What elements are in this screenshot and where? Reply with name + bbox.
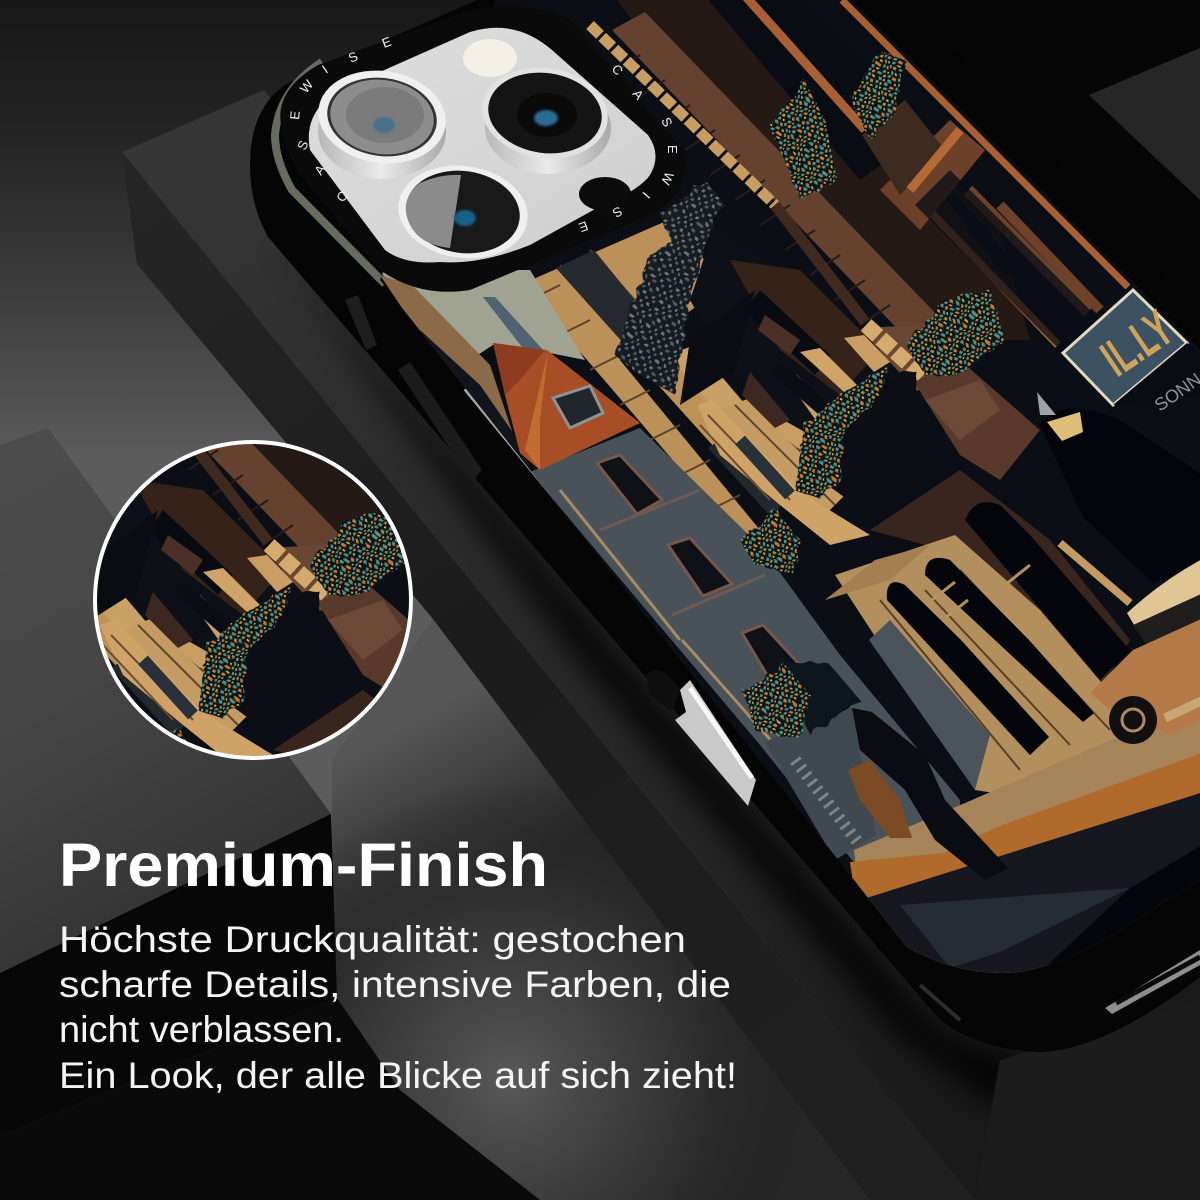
charging port — [1105, 950, 1200, 1014]
left block front — [0, 814, 337, 1136]
bottom left shadow — [0, 998, 540, 1200]
upper backdrop — [0, 0, 840, 1200]
top right block face — [1089, 48, 1200, 200]
side button: volume — [398, 362, 482, 482]
left block top — [0, 428, 331, 973]
inset magnifier — [93, 440, 413, 760]
phone contact shadow — [270, 240, 1040, 1110]
bottom right floor tone — [975, 1000, 1200, 1200]
side button: camera control — [345, 295, 377, 350]
body text: Ein Look, der alle Blicke auf sich zieht! — [59, 1055, 737, 1096]
body text: scharfe Details, intensive Farben, die — [59, 964, 731, 1005]
glossy edge highlight — [465, 389, 932, 950]
main block side — [122, 152, 975, 1200]
body text: Höchste Druckqualität: gestochen — [59, 919, 686, 960]
lens right — [476, 60, 614, 174]
body text — [59, 919, 737, 1096]
case artwork — [360, 0, 1200, 1000]
flash — [463, 39, 517, 77]
side button: silver — [675, 680, 756, 806]
camera glass — [309, 28, 656, 262]
sensor dot — [579, 177, 631, 211]
body text: nicht verblassen. — [59, 1009, 344, 1050]
lens bottom — [392, 157, 534, 267]
camera island — [280, 7, 686, 292]
olive painting strip under rim — [275, 62, 385, 284]
brand text on rim left: CASEWISE — [287, 34, 393, 205]
lit floor — [332, 619, 930, 1200]
heading: Premium-Finish — [59, 831, 548, 899]
phone case body — [250, 0, 1200, 1052]
top right black wall — [840, 0, 1200, 420]
lens left — [312, 63, 452, 179]
brand text on rim right: CASEWISE — [577, 61, 680, 235]
sign — [1063, 290, 1200, 415]
